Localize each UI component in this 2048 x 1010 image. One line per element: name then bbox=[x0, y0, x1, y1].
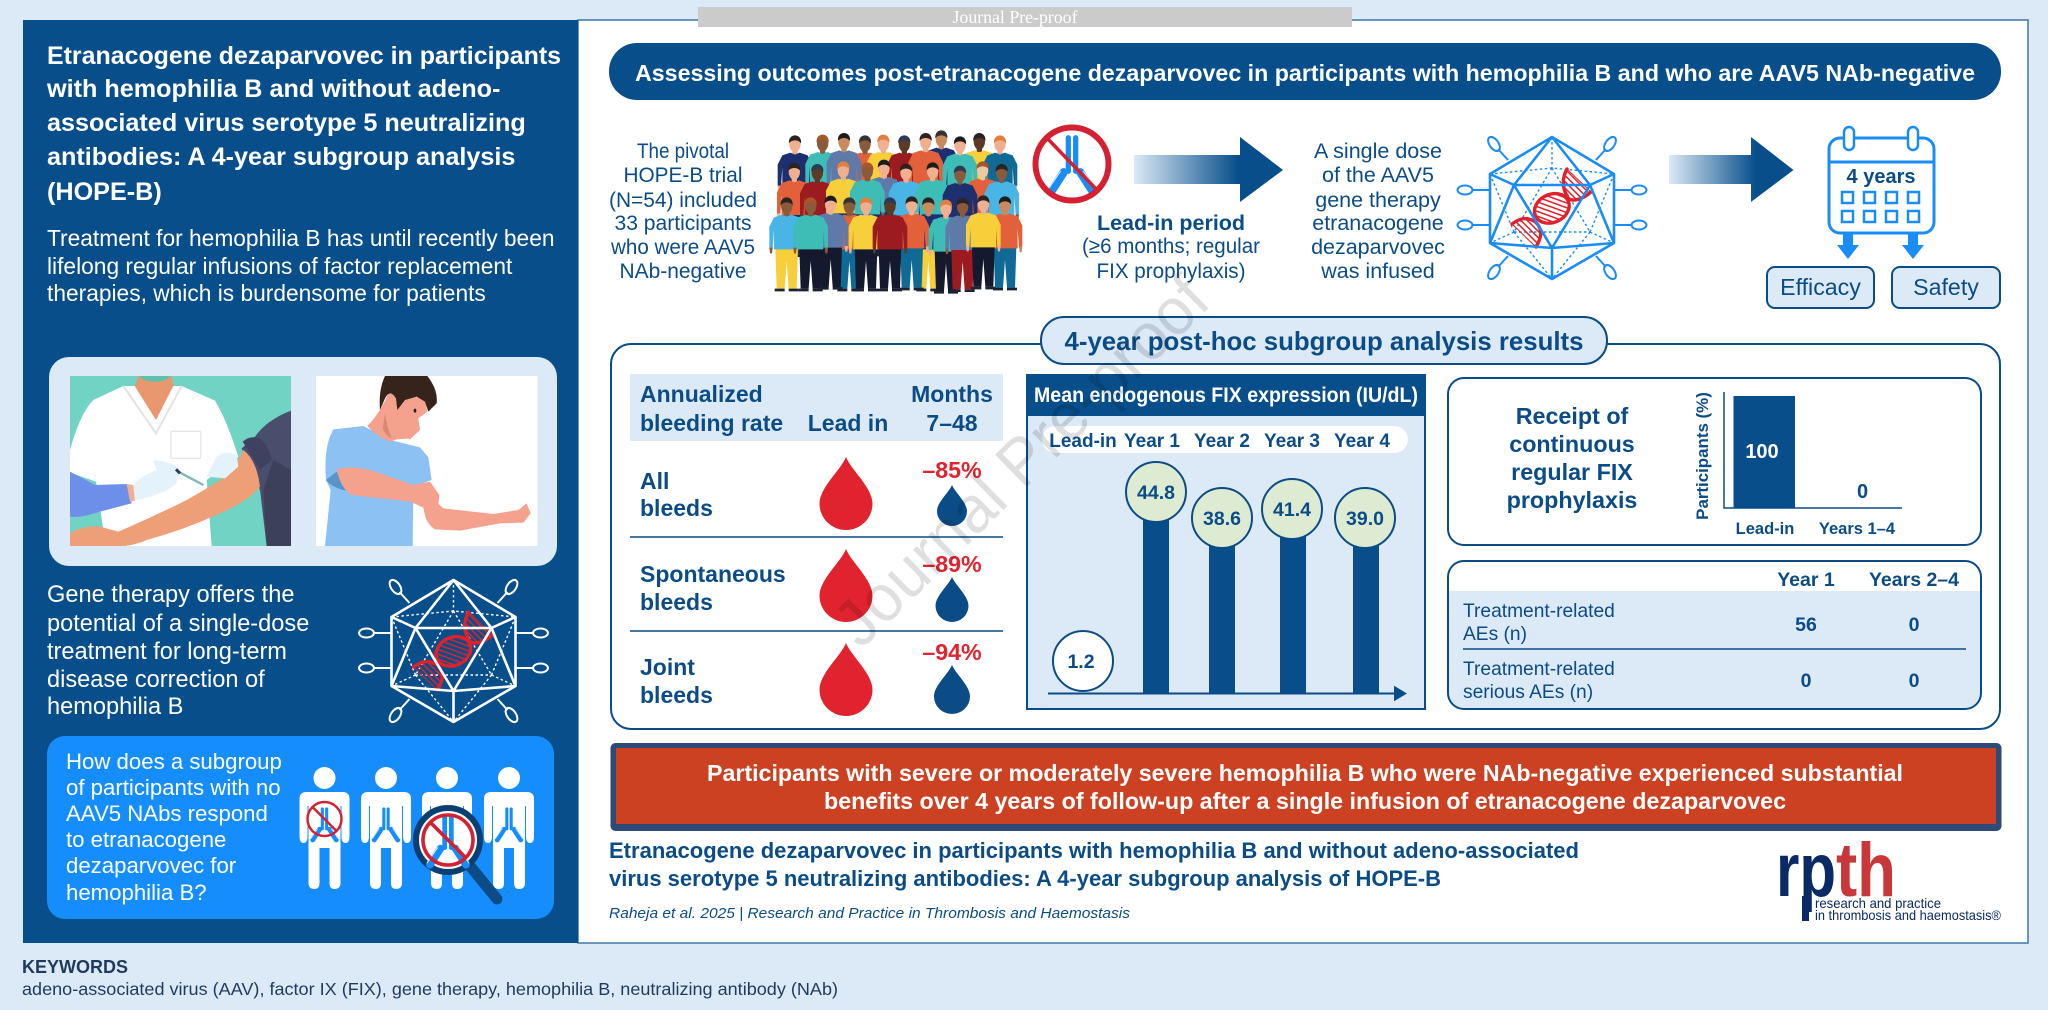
row: all bleeds: All bbox=[640, 468, 669, 494]
FIX expression chart bbox=[1026, 374, 1426, 709]
prophylaxis bar chart: 100 bbox=[1745, 441, 1779, 463]
logo: rpth bbox=[1776, 828, 2002, 923]
row: all bleeds: –85% bbox=[922, 457, 982, 483]
question text: dezaparvovec for bbox=[66, 853, 237, 878]
icon: no antibodies bbox=[1036, 128, 1108, 200]
citation: Raheja et al. 2025 | Research and Practice in Thrombosis and Haemostasis bbox=[609, 905, 1131, 922]
adverse events table: Treatment-related bbox=[1463, 659, 1615, 680]
lead-in text: FIX prophylaxis) bbox=[1096, 259, 1246, 283]
row: joint bleeds: Joint bbox=[640, 654, 695, 680]
conclusion banner bbox=[610, 743, 2002, 831]
adverse events table: Year 1 bbox=[1777, 569, 1835, 591]
prophylaxis label: continuous bbox=[1509, 431, 1635, 457]
year labels: Year 2 bbox=[1194, 431, 1250, 452]
question text: hemophilia B? bbox=[66, 880, 207, 905]
logo: rpth: rp bbox=[1776, 828, 1836, 913]
title: Etranacogene dezaparvovec in participants bbox=[47, 42, 561, 70]
adverse events table: serious AEs (n) bbox=[1463, 682, 1593, 703]
icon: AAV capsid blue bbox=[1458, 135, 1646, 281]
title: associated virus serotype 5 neutralizing bbox=[47, 109, 526, 137]
prophylaxis bar chart bbox=[1693, 392, 1902, 538]
logo: rpth: th bbox=[1836, 828, 1896, 913]
icon: four people with magnifier bbox=[300, 767, 534, 899]
keywords bbox=[22, 957, 838, 999]
FIX expression chart: Mean endogenous FIX expression (IU/dL) bbox=[1034, 384, 1418, 407]
trial text: (N=54) included bbox=[609, 188, 757, 212]
adverse events table: Treatment-related bbox=[1463, 601, 1615, 622]
safety box: Safety bbox=[1913, 274, 1979, 300]
arrow 1 bbox=[1134, 137, 1283, 202]
row: spontaneous bleeds: bleeds bbox=[640, 589, 713, 615]
trial text: who were AAV5 bbox=[610, 235, 755, 259]
question text: How does a subgroup bbox=[66, 749, 282, 774]
year labels bbox=[1042, 426, 1408, 453]
trial text: The pivotal bbox=[637, 139, 729, 163]
row: spontaneous bleeds bbox=[640, 549, 982, 622]
keywords: adeno-associated virus (AAV), factor IX (FIX), gene therapy, hemophilia B, neutralizing antibody (NAb) bbox=[22, 979, 838, 999]
row: joint bleeds: bleeds bbox=[640, 682, 713, 708]
single dose text: dezaparvovec bbox=[1311, 235, 1445, 259]
row: joint bleeds: –94% bbox=[922, 639, 982, 665]
results heading pill bbox=[1041, 317, 1607, 364]
front row bbox=[769, 195, 1022, 294]
row: spontaneous bleeds: –89% bbox=[922, 551, 982, 577]
prophylaxis bar chart: 0 bbox=[1857, 481, 1868, 503]
icon: calendar 4 years bbox=[1829, 127, 1934, 259]
back row bbox=[778, 130, 1017, 230]
adverse events table: 56 bbox=[1795, 614, 1817, 636]
single dose text: A single dose bbox=[1314, 139, 1442, 163]
intro text: lifelong regular infusions of factor replacement bbox=[47, 253, 513, 279]
title: with hemophilia B and without adeno- bbox=[46, 75, 500, 103]
adverse events table: AEs (n) bbox=[1463, 624, 1527, 645]
efficacy box bbox=[1767, 267, 1874, 308]
safety box bbox=[1892, 267, 2000, 308]
single dose text: of the AAV5 bbox=[1322, 163, 1434, 187]
trial text: 33 participants bbox=[614, 211, 752, 235]
title bbox=[46, 42, 561, 206]
logo: rpth: in thrombosis and haemostasis® bbox=[1815, 907, 2002, 923]
intro text bbox=[47, 225, 555, 306]
intro text: therapies, which is burdensome for patients bbox=[47, 280, 486, 306]
logo: rpth: research and practice bbox=[1815, 895, 1941, 911]
gene therapy text: Gene therapy offers the bbox=[47, 582, 294, 608]
trial text: HOPE-B trial bbox=[624, 163, 742, 187]
prophylaxis bar chart: Lead-in bbox=[1736, 520, 1794, 538]
gene therapy text bbox=[47, 582, 309, 720]
axis arrow bbox=[1048, 688, 1405, 700]
watermark: Journal Pre-proof bbox=[819, 261, 1223, 660]
icon: crowd of participants bbox=[769, 130, 1022, 294]
title: antibodies: A 4-year subgroup analysis bbox=[47, 143, 515, 171]
prophylaxis label: regular FIX bbox=[1511, 459, 1633, 485]
efficacy box: Efficacy bbox=[1780, 274, 1861, 300]
illustration: nurse giving infusion bbox=[70, 376, 291, 546]
value bubbles bbox=[1053, 462, 1395, 691]
article title: virus serotype 5 neutralizing antibodies: A 4-year subgroup analysis of HOPE-B bbox=[609, 866, 1441, 891]
illustrations panel bbox=[49, 357, 557, 566]
adverse events table: 0 bbox=[1909, 670, 1920, 692]
lead-in text: Lead-in period bbox=[1097, 211, 1245, 235]
trial text: NAb-negative bbox=[620, 259, 746, 283]
year labels: Lead-in bbox=[1049, 431, 1117, 452]
single dose text: gene therapy bbox=[1315, 188, 1441, 212]
results frame bbox=[611, 344, 2000, 729]
conclusion banner: benefits over 4 years of follow-up after a single infusion of etranacogene dezaparvovec bbox=[824, 788, 1786, 814]
title: (HOPE-B) bbox=[47, 178, 162, 206]
trial text bbox=[609, 139, 757, 283]
question text bbox=[66, 749, 282, 905]
prophylaxis bar chart: Participants (%) bbox=[1693, 392, 1712, 520]
FIX expression chart: 1.2 bbox=[1067, 651, 1095, 673]
arrow 2 bbox=[1669, 137, 1794, 202]
FIX expression chart: 44.8 bbox=[1137, 482, 1175, 504]
table header: Lead in bbox=[808, 410, 888, 436]
gene therapy text: hemophilia B bbox=[47, 694, 183, 720]
gene therapy text: treatment for long-term bbox=[47, 639, 287, 665]
row: joint bleeds bbox=[640, 639, 982, 716]
lead-in text: (≥6 months; regular bbox=[1082, 234, 1260, 258]
intro text: Treatment for hemophilia B has until recently been bbox=[47, 225, 555, 251]
prophylaxis label bbox=[1507, 403, 1637, 513]
adverse events table: 0 bbox=[1909, 614, 1920, 636]
lead-in text bbox=[1082, 211, 1260, 283]
header pill: Assessing outcomes post-etranacogene dezaparvovec in participants with hemophilia B and who are AAV5 NAb-negative bbox=[635, 60, 1975, 86]
table header: Annualized bbox=[640, 381, 763, 407]
adverse events table bbox=[1448, 561, 1981, 709]
prophylaxis label: Receipt of bbox=[1516, 403, 1629, 429]
main white panel bbox=[578, 20, 2028, 943]
middle row bbox=[777, 160, 1019, 260]
illustration: patient self-infusing bbox=[316, 376, 537, 546]
article title: Etranacogene dezaparvovec in participants with hemophilia B and without adeno-associated bbox=[609, 838, 1579, 863]
FIX expression chart: 39.0 bbox=[1346, 508, 1384, 530]
question text: to etranacogene bbox=[66, 827, 226, 852]
single dose text bbox=[1311, 139, 1445, 283]
header pill bbox=[609, 43, 2001, 100]
journal pre-proof banner: Journal Pre-proof bbox=[952, 7, 1078, 27]
FIX expression chart: 38.6 bbox=[1203, 508, 1241, 530]
left panel bbox=[23, 20, 578, 943]
row: all bleeds bbox=[640, 457, 982, 530]
article title bbox=[609, 838, 1579, 891]
prophylaxis label: prophylaxis bbox=[1507, 487, 1637, 513]
table header bbox=[630, 374, 1003, 441]
row: spontaneous bleeds: Spontaneous bbox=[640, 561, 786, 587]
journal pre-proof banner bbox=[698, 7, 1352, 27]
bars bbox=[1143, 500, 1379, 693]
question text: of participants with no bbox=[66, 775, 281, 800]
single dose text: was infused bbox=[1320, 259, 1435, 283]
table header: bleeding rate bbox=[640, 410, 783, 436]
table header: Months bbox=[911, 381, 993, 407]
keywords: KEYWORDS bbox=[22, 957, 128, 977]
gene therapy text: potential of a single-dose bbox=[47, 611, 309, 637]
results heading pill: 4-year post-hoc subgroup analysis results bbox=[1065, 328, 1583, 356]
year labels: Year 4 bbox=[1334, 431, 1390, 452]
prophylaxis panel bbox=[1448, 378, 1981, 545]
adverse events table: 0 bbox=[1801, 670, 1812, 692]
FIX expression chart: 41.4 bbox=[1273, 499, 1311, 521]
question text: AAV5 NAbs respond bbox=[66, 801, 268, 826]
icon: calendar 4 years: 4 years bbox=[1847, 166, 1915, 188]
bleeding rate table bbox=[630, 374, 1003, 716]
question box bbox=[47, 736, 554, 919]
single dose text: etranacogene bbox=[1312, 211, 1444, 235]
conclusion banner: Participants with severe or moderately severe hemophilia B who were NAb-negative experienced substantial bbox=[707, 760, 1903, 786]
prophylaxis bar chart: Years 1–4 bbox=[1819, 520, 1896, 538]
table header: 7–48 bbox=[926, 410, 978, 436]
year labels: Year 1 bbox=[1124, 431, 1180, 452]
gene therapy text: disease correction of bbox=[47, 667, 265, 693]
row: all bleeds: bleeds bbox=[640, 495, 713, 521]
year labels: Year 3 bbox=[1264, 431, 1320, 452]
adverse events table: Years 2–4 bbox=[1869, 569, 1959, 591]
icon: AAV capsid white bbox=[359, 578, 548, 724]
